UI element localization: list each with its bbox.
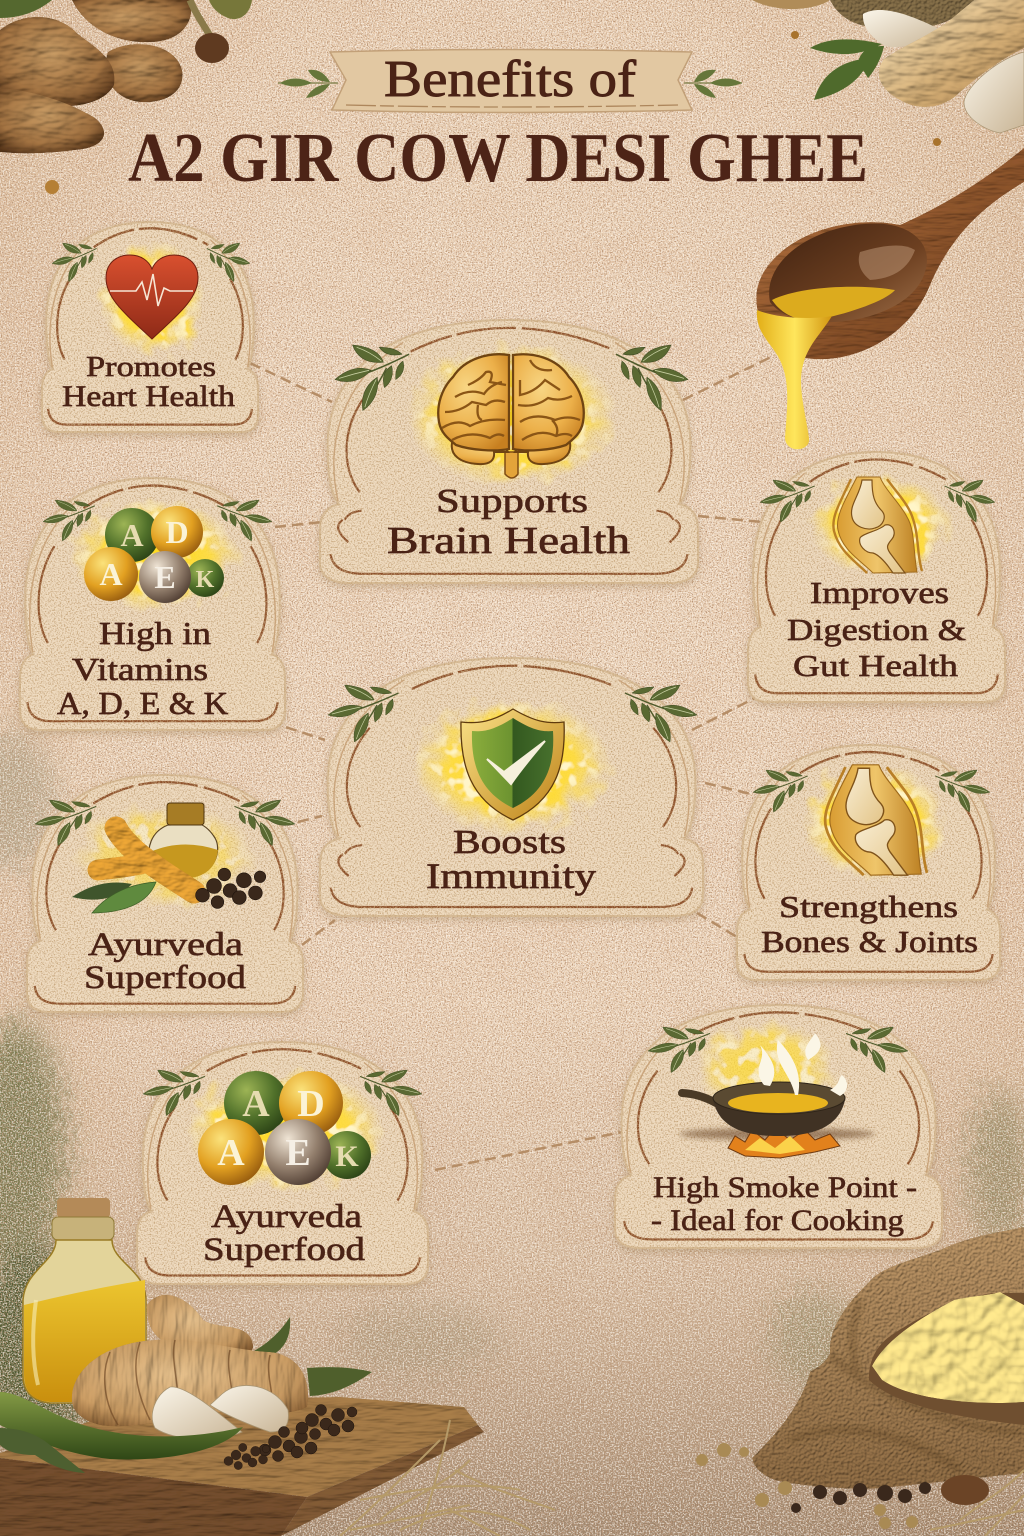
label: Improves Digestion & Gut Health: Improves <box>810 575 949 610</box>
label: Boosts Immunity: Boosts <box>453 824 566 861</box>
panel: Ayurveda Superfood (upper) <box>27 775 303 1012</box>
decoration: title leaves right <box>684 70 742 98</box>
banner: Benefits of <box>330 50 692 112</box>
label: Strengthens Bones & Joints: Bones & Joints <box>761 924 978 959</box>
label: Ayurveda Superfood: Superfood <box>84 960 247 996</box>
oil bottle <box>23 1198 146 1403</box>
icon: vitamin spheres: E <box>154 559 176 595</box>
title: A2 GIR COW DESI GHEE <box>128 120 868 197</box>
icon: vitamin spheres: A <box>120 517 144 553</box>
garlic <box>152 1385 288 1439</box>
label: Improves Digestion & Gut Health: Digestion & <box>787 612 966 647</box>
icon: vitamin spheres <box>70 500 240 610</box>
icon: vitamin spheres large <box>185 1070 385 1190</box>
icon: vitamin spheres: A <box>99 556 123 592</box>
label: Strengthens Bones & Joints <box>761 889 978 959</box>
connectors: dashed lines <box>250 355 775 1170</box>
decoration: scattered grains and straw <box>340 1420 1024 1536</box>
leaves behind ginger <box>252 1317 372 1396</box>
illustration: ginger and spices top-left <box>0 0 252 194</box>
label: High in Vitamins A, D, E & K <box>57 615 228 721</box>
ginger root <box>72 1295 308 1426</box>
label: Boosts Immunity <box>426 824 596 896</box>
peppercorns <box>224 1404 357 1470</box>
label: Ayurveda Superfood: Superfood <box>203 1232 366 1268</box>
icon: brain <box>406 343 616 487</box>
label: High in Vitamins A, D, E & K: A, D, E & K <box>57 685 228 721</box>
label: Strengthens Bones & Joints: Strengthens <box>779 889 958 924</box>
heading: Benefits of: Benefits of <box>384 51 637 108</box>
label: Supports Brain Health: Brain Health <box>387 520 630 562</box>
icon: shield <box>412 697 612 833</box>
icon: vitamin spheres large: A <box>217 1132 245 1174</box>
icon: bones joint <box>803 765 947 878</box>
illustration: wooden spoon with dripping ghee <box>756 148 1024 449</box>
panel: Strengthens Bones & Joints <box>737 745 1000 980</box>
label: High in Vitamins A, D, E & K: High in <box>99 615 211 651</box>
panel: High Smoke Point <box>615 1005 942 1248</box>
illustration: ginger and garlic top-right <box>752 0 1024 146</box>
label: Ayurveda Superfood <box>203 1199 366 1268</box>
panel: Supports Brain Health <box>320 320 698 583</box>
panel: Ayurveda Superfood (lower) <box>137 1042 428 1284</box>
label: Improves Digestion & Gut Health: Gut Health <box>793 648 959 683</box>
panel: Improves Digestion & Gut Health <box>748 452 1005 702</box>
icon: vitamin spheres large: E <box>285 1132 311 1174</box>
wooden board <box>0 1397 484 1536</box>
icon: vitamin spheres large: D <box>297 1083 325 1125</box>
label: High Smoke Point - Ideal for Cooking: High Smoke Point - <box>653 1171 917 1204</box>
panel: Promotes Heart Health <box>42 222 258 432</box>
icon: vitamin spheres large: K <box>335 1140 359 1173</box>
label: Improves Digestion & Gut Health <box>787 575 966 683</box>
icon: vitamin spheres large: A <box>242 1083 270 1125</box>
label: High Smoke Point - Ideal for Cooking: - Ideal for Cooking <box>651 1204 904 1237</box>
label: Boosts Immunity: Immunity <box>426 856 596 896</box>
icon: turmeric, jar and pepper <box>72 803 266 913</box>
label: Supports Brain Health: Supports <box>436 483 588 520</box>
label: Supports Brain Health <box>387 483 630 562</box>
panel: Boosts Immunity <box>320 658 703 916</box>
icon: joint <box>810 473 950 577</box>
label: Ayurveda Superfood <box>84 927 247 996</box>
label: High in Vitamins A, D, E & K: Vitamins <box>72 651 208 687</box>
chili <box>0 1392 243 1459</box>
label: Promotes Heart Health <box>62 351 235 413</box>
decoration: title leaves left <box>278 70 338 98</box>
icon: vitamin spheres: D <box>165 514 189 550</box>
icon: heart <box>100 240 204 356</box>
label: Ayurveda Superfood: Ayurveda <box>88 927 243 963</box>
illustration: burlap sack of ghee <box>752 1227 1024 1489</box>
label: Ayurveda Superfood: Ayurveda <box>211 1199 362 1235</box>
icon: vitamin spheres: K <box>196 567 215 593</box>
icon: pan over fire with steam <box>679 1020 875 1158</box>
label: High Smoke Point - Ideal for Cooking <box>651 1171 917 1237</box>
panel: High in Vitamins <box>20 478 285 730</box>
label: Promotes Heart Health: Heart Health <box>62 380 235 413</box>
illustration: wooden board with bottle, ginger, garlic, chili <box>0 1198 484 1536</box>
label: Promotes Heart Health: Promotes <box>86 351 216 383</box>
